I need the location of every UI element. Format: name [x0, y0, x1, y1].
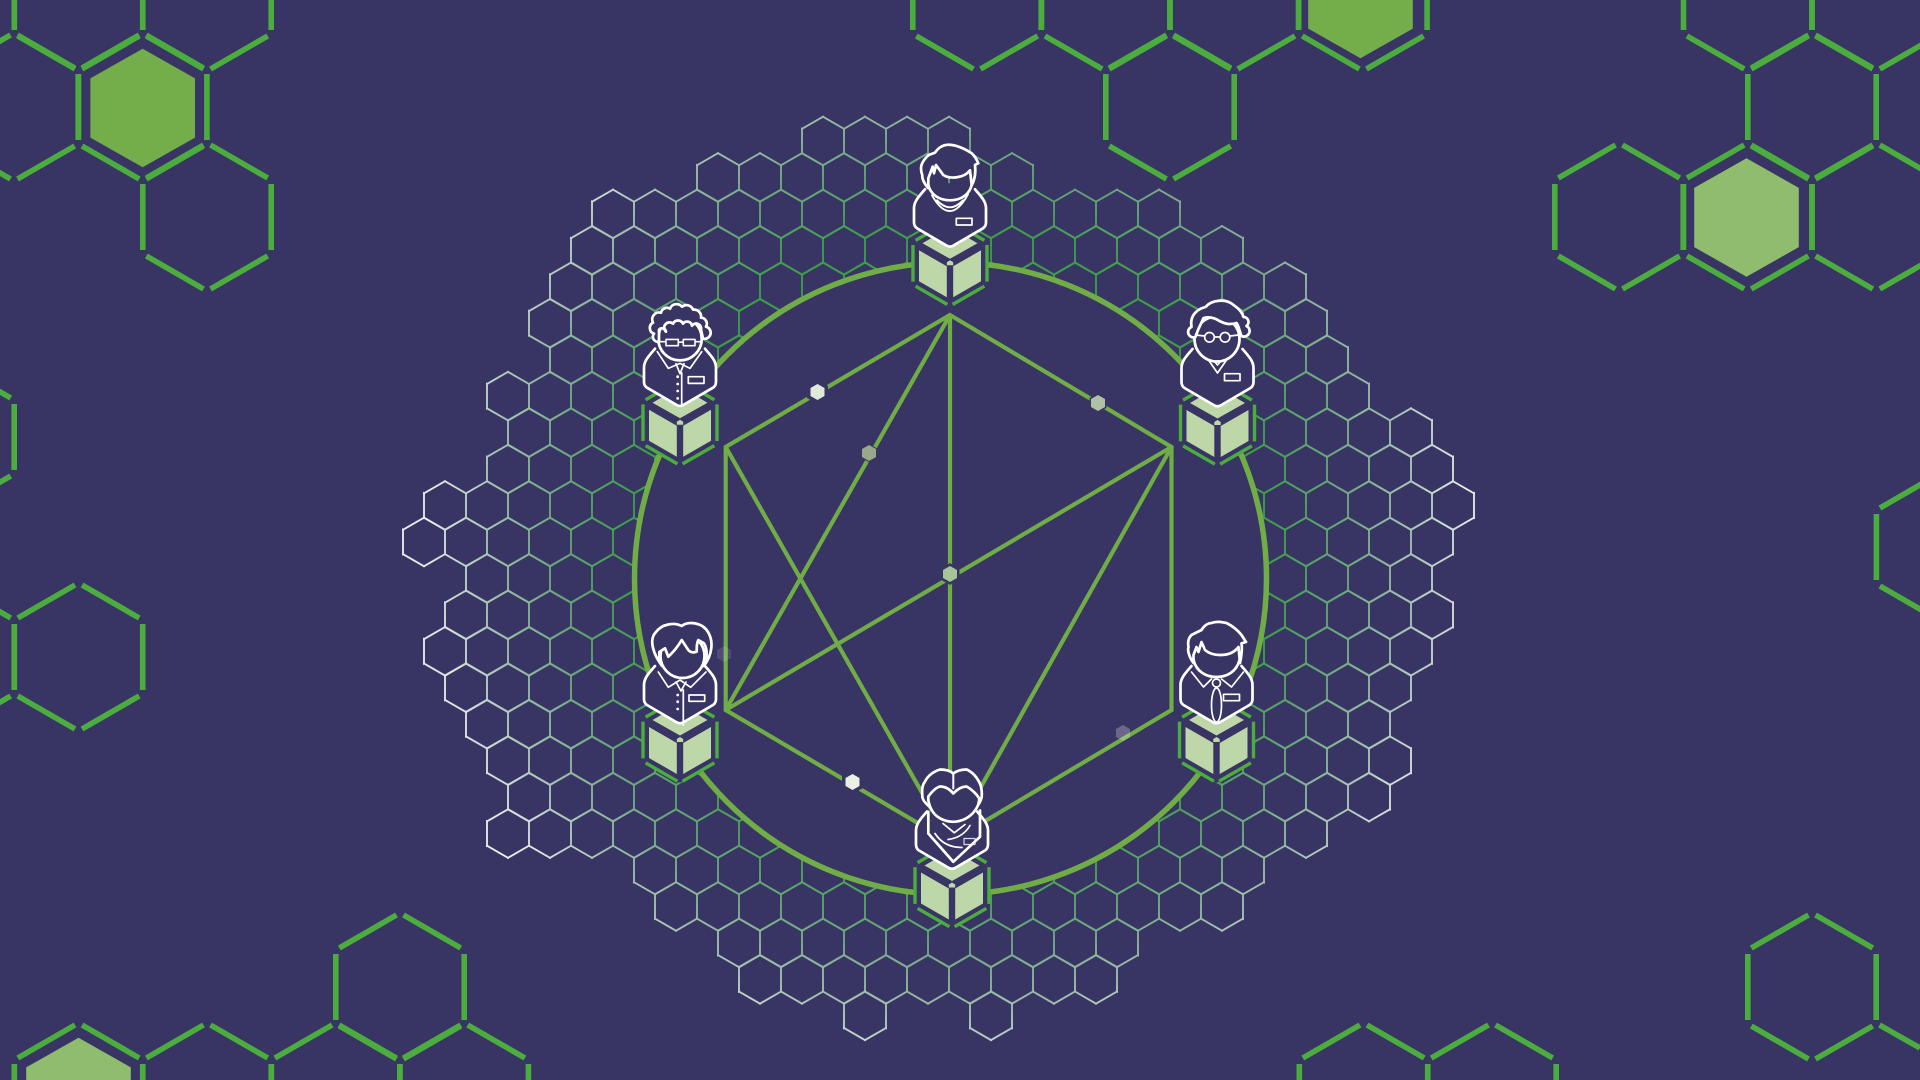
- hexagon network lines: [726, 315, 1172, 842]
- ring: [634, 262, 1266, 894]
- node box: bottom: [915, 843, 989, 928]
- node box: upper left: [643, 380, 717, 465]
- person: bottom, long hair with scarf: [916, 770, 988, 869]
- person: lower left, round hair with collar: [644, 623, 716, 725]
- node box: lower right: [1180, 697, 1254, 783]
- background hexagons: top centre cluster: [913, 0, 1427, 179]
- background hexagons: left side: [0, 365, 143, 729]
- small hexagon mesh: [390, 100, 1490, 1050]
- node box: top: [913, 221, 987, 306]
- person: upper right, curly hair with round glasses: [1182, 301, 1254, 406]
- background hexagons: top right cluster: [1555, 0, 1920, 289]
- node box: upper right: [1180, 380, 1254, 466]
- background hexagons: right and bottom: [1299, 475, 1920, 1080]
- moving nodes on lines: [717, 384, 1130, 790]
- background hexagons: top left cluster: [0, 0, 271, 289]
- background hexagons: bottom left cluster: [14, 915, 528, 1080]
- person: lower right, side-parted hair with tie: [1180, 622, 1252, 723]
- person: top, short hair with round neck: [914, 145, 986, 247]
- person: upper left, curly hair with glasses: [644, 304, 716, 406]
- node box: lower left: [643, 697, 717, 783]
